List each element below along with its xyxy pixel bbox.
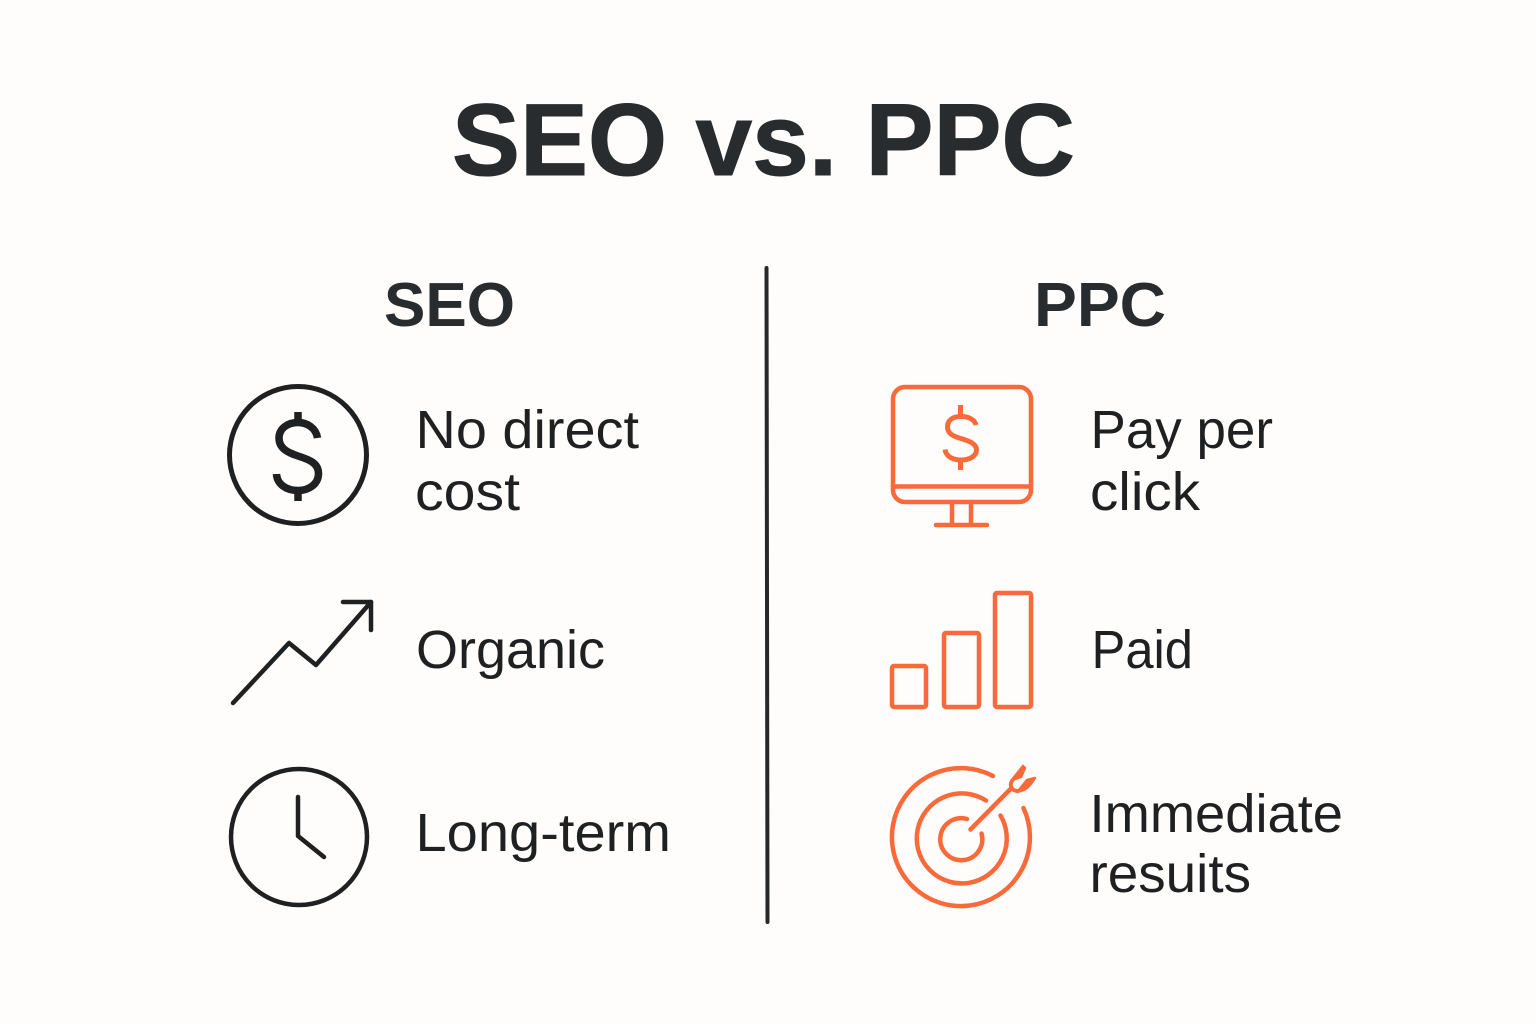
icon: monitor with dollar: [893, 387, 1031, 525]
title: SEO vs. PPC: [452, 83, 1075, 197]
icon: growth arrow: [233, 602, 371, 703]
center divider: [766, 268, 768, 922]
text: pay per click: [1090, 400, 1273, 522]
text: immediate results: [1090, 784, 1343, 904]
icon: target with arrow: [892, 766, 1035, 906]
panel: PPC: [892, 271, 1343, 906]
text: no direct cost: [415, 400, 639, 522]
text: organic: Organic: [416, 620, 605, 680]
text: pay per click: Pay per: [1090, 400, 1273, 460]
text: paid: Paid: [1092, 620, 1193, 680]
icon: dollar coin: [230, 386, 366, 524]
icon: clock: [231, 769, 367, 905]
heading: SEO: SEO: [384, 271, 515, 340]
text: immediate results: resuits: [1090, 844, 1251, 904]
text: long-term: Long-term: [416, 803, 671, 863]
panel: SEO: [230, 271, 671, 905]
heading: PPC: PPC: [1034, 271, 1166, 340]
text: no direct cost: cost: [415, 462, 520, 522]
text: immediate results: Immediate: [1090, 784, 1343, 844]
icon: bar chart: [892, 593, 1031, 707]
text: pay per click: click: [1090, 462, 1201, 522]
text: no direct cost: No direct: [416, 400, 639, 460]
